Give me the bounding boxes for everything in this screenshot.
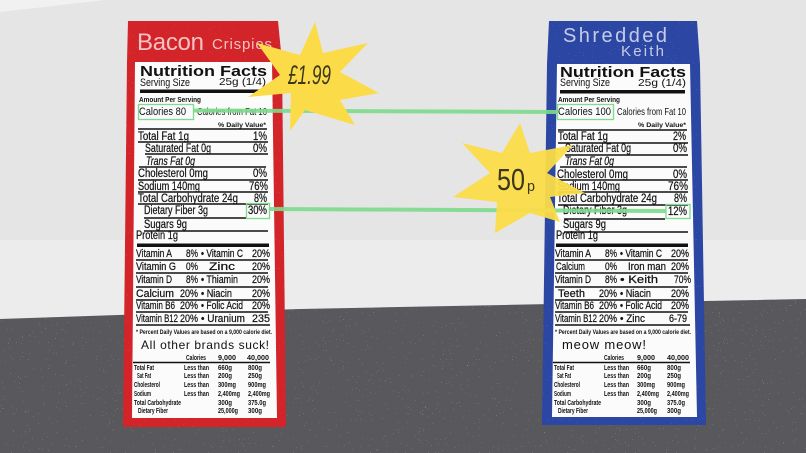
reference table: Less than <box>604 373 629 380</box>
nutrient rows: 0% <box>253 143 267 155</box>
reference table: 800g <box>248 365 262 372</box>
vitamins table: Calcium <box>556 261 585 273</box>
nutrient rows: Total Fat 1g <box>558 131 608 143</box>
vitamins table: 20% <box>671 288 689 300</box>
vitamins table: • Uranium <box>201 313 245 325</box>
vitamins table: 20% <box>671 261 689 273</box>
vitamins table: Vitamin A <box>136 248 173 260</box>
calories row <box>558 106 686 129</box>
reference table: Less than <box>604 382 629 389</box>
vitamins table: 235 <box>252 313 270 325</box>
title: Bacon Crispies <box>137 29 272 56</box>
nutrient rows <box>556 130 688 242</box>
nutrition heading: 25g (1/4) <box>638 77 686 89</box>
reference table: 9,000 <box>637 355 655 362</box>
vitamins table: 8% <box>186 274 198 286</box>
reference table: 250g <box>248 373 262 380</box>
vitamins table: Vitamin G <box>136 261 176 273</box>
reference table: Calories <box>186 355 206 362</box>
vitamins table: Vitamin A <box>555 248 592 260</box>
reference table: 2,400mg <box>667 391 689 398</box>
vitamins table: 70% <box>674 274 691 286</box>
vitamins table: 20% <box>252 300 270 312</box>
nutrition heading: Nutrition Facts <box>140 63 267 80</box>
nutrient rows: Protein 1g <box>556 230 598 242</box>
reference table: 900mg <box>248 382 266 389</box>
reference table: Dietary Fiber <box>558 408 588 415</box>
price burst: 50p <box>453 123 585 233</box>
vitamins table: • Keith <box>620 274 658 286</box>
reference table: Total Fat <box>134 365 154 372</box>
reference table: Less than <box>184 382 209 389</box>
vitamins table <box>136 244 270 325</box>
nutrient rows: 76% <box>668 181 688 193</box>
nutrition heading <box>558 64 686 104</box>
reference table: 300mg <box>218 382 236 389</box>
nutrient rows: Total Carbohydrate 24g <box>557 193 657 205</box>
nutrient rows: Dietary Fiber 3g <box>144 205 208 217</box>
reference table <box>133 355 270 415</box>
price burst: 50p: 50 <box>497 162 525 197</box>
vitamins table: 8% <box>605 248 617 260</box>
nutrient rows: 2% <box>673 131 686 143</box>
nutrient rows: 76% <box>249 181 268 193</box>
footnote and slogan: All other brands suck! <box>141 338 269 352</box>
footnote and slogan: * Percent Daily Values are based on a 9,000 calorie diet. <box>555 329 691 336</box>
panel: Shredded Keith box <box>542 21 706 425</box>
reference table: Cholesterol <box>554 382 580 389</box>
nutrient rows: Protein 1g <box>136 230 178 242</box>
reference table: 200g <box>218 373 232 380</box>
connector: dietary fibre comparison <box>246 204 690 218</box>
reference table: Cholesterol <box>134 382 160 389</box>
reference table: 2,400mg <box>218 391 240 398</box>
vitamins table: • Thiamin <box>201 274 238 286</box>
vitamins table: • Niacin <box>201 288 232 300</box>
nutrition heading: Nutrition Facts <box>560 64 686 81</box>
vitamins table: 0% <box>605 261 617 273</box>
vitamins table: Zinc <box>209 261 236 273</box>
calories row: Calories 80 <box>139 106 186 118</box>
nutrition heading: Serving Size <box>140 77 190 89</box>
vitamins table: 8% <box>186 248 198 260</box>
reference table: Total Carbohydrate <box>134 400 181 407</box>
panel: Bacon Crispies box <box>123 21 286 427</box>
nutrient rows: Total Fat 1g <box>138 131 189 143</box>
reference table: 300mg <box>637 382 655 389</box>
nutrient rows: 30% <box>248 205 267 217</box>
reference table: Less than <box>184 365 209 372</box>
vitamins table: Vitamin B12 <box>555 313 597 325</box>
price burst: £1.99: £1.99 <box>287 60 331 90</box>
nutrition heading: Amount Per Serving <box>558 97 620 104</box>
vitamins table: Vitamin B6 <box>555 300 594 312</box>
title: Bacon Crispies: Bacon <box>137 29 204 56</box>
vitamins table: • Folic Acid <box>201 300 243 312</box>
calories row: Calories 100 <box>558 106 611 118</box>
calories row: % Daily Value* <box>638 122 686 129</box>
reference table: 300g <box>667 408 681 415</box>
vitamins table: 20% <box>599 300 617 312</box>
calories row <box>139 106 267 129</box>
nutrition heading: Serving Size <box>560 77 610 89</box>
nutrient rows: 0% <box>673 143 687 155</box>
vitamins table: 20% <box>252 248 270 260</box>
nutrition heading <box>139 63 267 104</box>
title: Shredded Keith: Shredded <box>563 25 667 47</box>
nutrition heading: 25g (1/4) <box>219 76 266 88</box>
vitamins table: • Folic Acid <box>620 300 662 312</box>
reference table: Calories <box>604 355 624 362</box>
vitamins table: Vitamin D <box>136 274 172 286</box>
vitamins table: Vitamin D <box>555 274 591 286</box>
reference table: Sodium <box>554 391 571 398</box>
floor <box>0 299 806 453</box>
reference table: 300g <box>637 400 651 407</box>
reference table: 660g <box>218 365 232 372</box>
reference table: 800g <box>667 365 681 372</box>
reference table: 2,400mg <box>637 391 659 398</box>
price burst: 50p: p <box>527 178 535 195</box>
reference table: Total Carbohydrate <box>554 400 601 407</box>
title: Bacon Crispies: Crispies <box>212 36 272 53</box>
reference table: Dietary Fiber <box>138 408 168 415</box>
nutrient rows: Saturated Fat 0g <box>145 143 211 155</box>
vitamins table: 20% <box>252 261 270 273</box>
nutrient rows: Saturated Fat 0g <box>565 143 631 155</box>
reference table: 300g <box>248 408 262 415</box>
reference table: Sat Fat <box>137 373 151 380</box>
nutrient rows: Sugars 9g <box>144 219 187 231</box>
vitamins table: • Niacin <box>620 288 651 300</box>
nutrient rows: 0% <box>253 168 267 180</box>
vitamins table: • Zinc <box>620 313 645 325</box>
nutrient rows: 8% <box>254 193 267 205</box>
price burst: £1.99 <box>248 22 379 131</box>
connector: calories comparison <box>138 104 614 120</box>
nutrient rows: Cholesterol 0mg <box>557 169 628 181</box>
footnote and slogan <box>555 329 691 352</box>
nutrient rows: Dietary Fiber 3g <box>563 205 627 217</box>
vitamins table: Teeth <box>558 288 585 300</box>
vitamins table: 20% <box>599 313 617 325</box>
vitamins table: 20% <box>671 300 689 312</box>
reference table: 40,000 <box>667 355 689 362</box>
reference table: 250g <box>667 373 681 380</box>
nutrient rows: Sugars 9g <box>563 219 606 231</box>
footnote and slogan: * Percent Daily Values are based on a 9,000 calorie diet. <box>136 329 272 336</box>
reference table: Less than <box>184 373 209 380</box>
vitamins table: Vitamin B6 <box>136 300 175 312</box>
reference table: 25,000g <box>637 408 657 415</box>
nutrient rows <box>136 129 268 242</box>
nutrient rows: 12% <box>668 206 687 218</box>
nutrient rows: 1% <box>253 131 267 143</box>
vitamins table: Iron man <box>628 261 666 273</box>
nutrient rows: 8% <box>674 193 687 205</box>
reference table: 375.0g <box>667 400 685 407</box>
reference table: 300g <box>218 400 232 407</box>
vitamins table: Calcium <box>136 288 174 300</box>
vitamins table: 20% <box>252 288 270 300</box>
reference table: Sat Fat <box>557 373 571 380</box>
reference table: Less than <box>184 391 209 398</box>
reference table: 375.0g <box>248 400 266 407</box>
calories row: Calories from Fat 10 <box>197 106 267 118</box>
vitamins table: • Vitamin C <box>201 248 243 260</box>
vitamins table: 20% <box>671 248 689 260</box>
reference table: 200g <box>637 373 651 380</box>
reference table <box>553 355 690 415</box>
vitamins table <box>555 244 691 325</box>
vitamins table: 0% <box>186 261 198 273</box>
nutrient rows: Total Carbohydrate 24g <box>138 193 238 205</box>
calories row: Calories from Fat 10 <box>617 106 686 118</box>
reference table: Less than <box>604 391 629 398</box>
title: Shredded Keith: Keith <box>621 43 664 60</box>
vitamins table: 20% <box>180 313 198 325</box>
footnote and slogan <box>136 329 272 352</box>
reference table: 900mg <box>667 382 685 389</box>
nutrient rows: Cholesterol 0mg <box>138 168 208 180</box>
reference table: Sodium <box>134 391 151 398</box>
title: Shredded Keith <box>563 25 667 60</box>
nutrient rows: Sodium 140mg <box>138 181 200 193</box>
nutrient rows: 0% <box>673 169 687 181</box>
vitamins table: 20% <box>180 288 198 300</box>
reference table: 9,000 <box>218 355 236 362</box>
reference table: 25,000g <box>218 408 238 415</box>
nutrient rows: Trans Fat 0g <box>565 156 614 168</box>
calories row: % Daily Value* <box>218 122 266 129</box>
footnote and slogan: meow meow! <box>562 337 646 352</box>
reference table: 40,000 <box>247 355 269 362</box>
vitamins table: 6-79 <box>669 313 687 325</box>
vitamins table: 8% <box>605 274 617 286</box>
reference table: 660g <box>637 365 651 372</box>
vitamins table: 20% <box>252 274 270 286</box>
vitamins table: Vitamin B12 <box>136 313 178 325</box>
nutrient rows: Trans Fat 0g <box>146 156 195 168</box>
reference table: Less than <box>604 365 629 372</box>
vitamins table: • Vitamin C <box>620 248 662 260</box>
vitamins table: 20% <box>599 288 617 300</box>
nutrition heading: Amount Per Serving <box>139 97 201 104</box>
reference table: Total Fat <box>554 365 574 372</box>
reference table: 2,400mg <box>248 391 270 398</box>
vitamins table: 20% <box>180 300 198 312</box>
nutrient rows: Sodium 140mg <box>558 181 620 193</box>
